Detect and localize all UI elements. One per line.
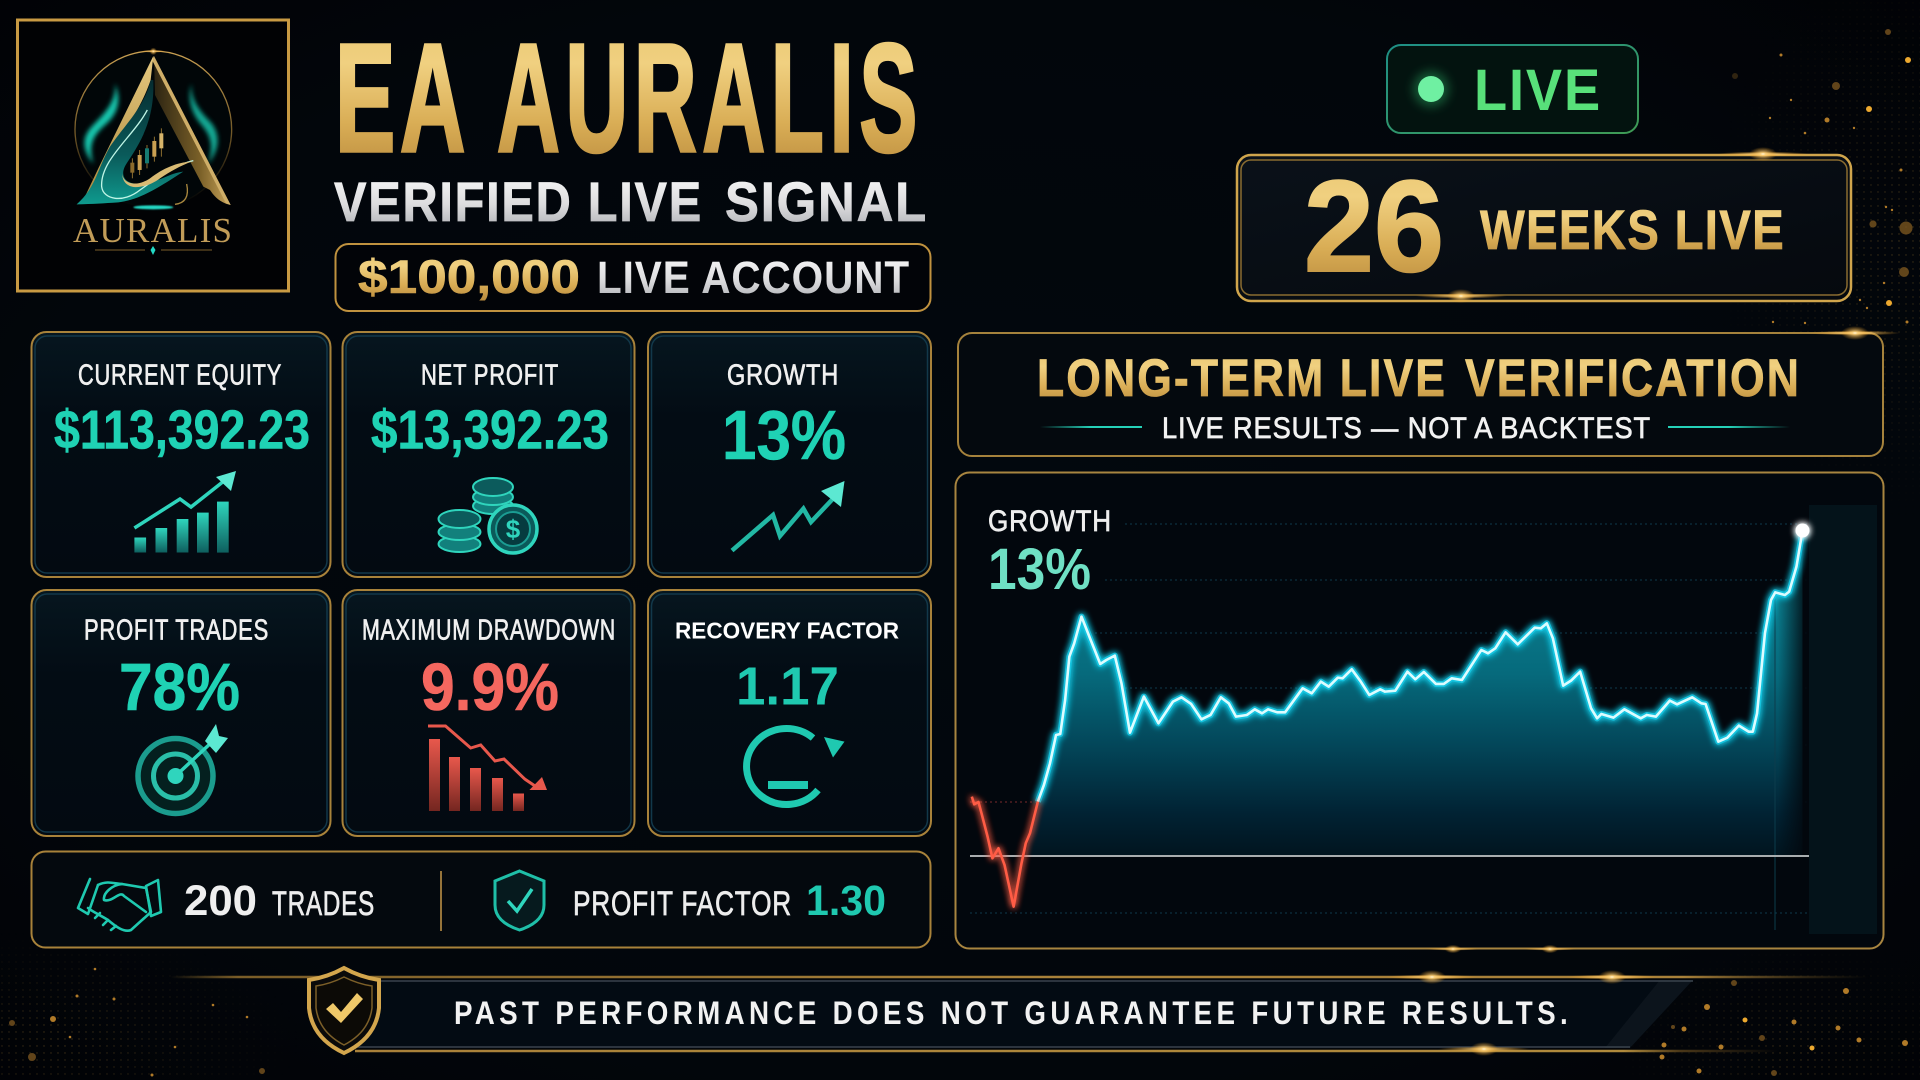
icon: bar chart with rising arrow xyxy=(134,471,236,553)
trades count: 200 xyxy=(184,877,257,925)
profit factor value: 1.30 xyxy=(806,877,886,925)
weeks label: WEEKS LIVE xyxy=(1480,198,1785,261)
verification heading: LONG-TERM LIVE xyxy=(1037,349,1447,408)
panel: growth chart xyxy=(956,472,1884,953)
card: current equity: $113,392.23 xyxy=(54,398,310,460)
card: profit trades xyxy=(32,590,330,836)
account badge xyxy=(336,244,930,311)
card: recovery factor: RECOVERY FACTOR xyxy=(675,618,899,644)
card: recovery factor xyxy=(648,590,931,836)
card: maximum drawdown xyxy=(342,590,634,836)
weeks live panel xyxy=(1237,147,1851,303)
card: growth xyxy=(648,332,931,577)
icon: zigzag arrow xyxy=(732,481,844,551)
verification subtitle: LIVE RESULTS — NOT A BACKTEST xyxy=(1162,412,1651,445)
chart growth value: 13% xyxy=(988,537,1091,602)
card: maximum drawdown: MAXIMUM DRAWDOWN xyxy=(362,614,616,646)
card: profit trades: PROFIT TRADES xyxy=(84,614,269,646)
profit factor label: PROFIT FACTOR xyxy=(573,885,792,923)
icon: gold shield xyxy=(309,968,379,1053)
account badge: $100,000 xyxy=(358,250,580,303)
live badge xyxy=(1387,45,1638,133)
disclaimer banner xyxy=(170,968,1870,1056)
title xyxy=(335,12,923,184)
icon: target with arrow xyxy=(138,724,228,814)
logo box xyxy=(18,20,288,291)
verification heading xyxy=(1037,349,1801,408)
icon: falling bars xyxy=(428,726,547,811)
chart: equity curve xyxy=(970,505,1877,934)
disclaimer text: PAST PERFORMANCE DOES NOT GUARANTEE FUTURE RESULTS. xyxy=(454,995,1572,1031)
logo wordmark: AURALIS xyxy=(73,211,232,250)
trades label: TRADES xyxy=(272,885,375,923)
card: current equity xyxy=(32,332,330,577)
weeks number: 26 xyxy=(1304,153,1444,299)
card: growth: 13% xyxy=(722,396,846,474)
card: current equity: CURRENT EQUITY xyxy=(78,360,282,392)
panel: long-term verification xyxy=(958,326,1901,456)
card: maximum drawdown: 9.9% xyxy=(421,650,559,725)
icon: coin stacks: $ xyxy=(506,514,521,544)
icon: recovery arrow xyxy=(747,729,844,805)
live badge: LIVE xyxy=(1474,58,1602,123)
card: net profit xyxy=(342,332,634,577)
card: net profit: $13,392.23 xyxy=(371,398,609,460)
subtitle: SIGNAL xyxy=(725,170,928,233)
stats bar xyxy=(32,852,930,948)
card: growth: GROWTH xyxy=(727,360,839,392)
icon: shield check xyxy=(495,871,544,930)
icon: handshake xyxy=(78,879,161,931)
icon: coin stacks xyxy=(438,478,537,553)
logo emblem xyxy=(75,48,232,209)
account badge: LIVE ACCOUNT xyxy=(597,252,910,303)
verification heading: VERIFICATION xyxy=(1465,349,1801,408)
title: EA xyxy=(335,12,470,184)
card: net profit: NET PROFIT xyxy=(421,360,559,392)
title: AURALIS xyxy=(497,12,923,184)
subtitle: VERIFIED LIVE xyxy=(334,170,703,233)
chart growth label: GROWTH xyxy=(988,505,1112,538)
card: recovery factor: 1.17 xyxy=(736,656,839,716)
card: profit trades: 78% xyxy=(119,650,240,725)
